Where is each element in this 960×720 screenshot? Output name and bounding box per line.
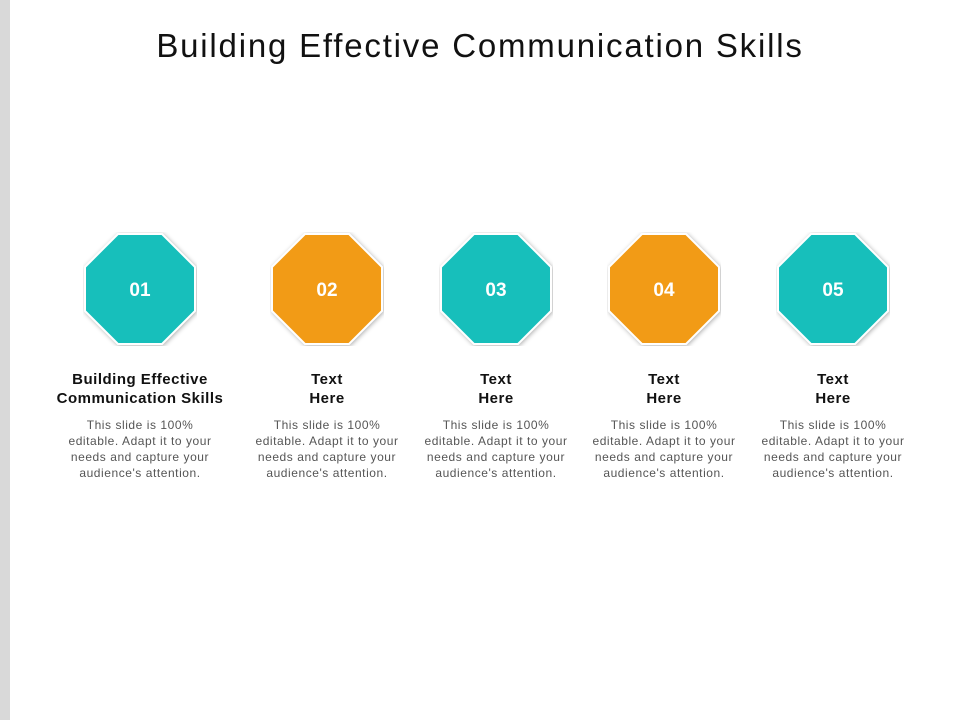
item 03: [424, 232, 568, 480]
text 04: [592, 418, 736, 480]
text 04: needs and capture your: [595, 450, 733, 464]
title: Building Effective Communication Skills: [156, 27, 804, 64]
text 02: [255, 418, 399, 480]
heading 05: [815, 371, 851, 407]
text 05: editable. Adapt it to your: [761, 434, 905, 448]
text 05: [761, 418, 905, 480]
item 04: [592, 232, 736, 480]
text 01: [68, 418, 212, 480]
icon: octagon 03: [439, 232, 553, 346]
icon: octagon 03: 03: [485, 280, 507, 301]
text 01: This slide is 100%: [87, 418, 193, 432]
text 03: needs and capture your: [427, 450, 565, 464]
text 03: [424, 418, 568, 480]
heading 04: Text: [648, 371, 680, 388]
icon: octagon 05: 05: [822, 280, 844, 301]
heading 04: Here: [646, 390, 682, 407]
icon: octagon 05: [776, 232, 890, 346]
icon: octagon 01: [83, 232, 197, 346]
text 05: needs and capture your: [764, 450, 902, 464]
text 01: audience's attention.: [79, 466, 201, 480]
text 01: needs and capture your: [71, 450, 209, 464]
text 01: editable. Adapt it to your: [68, 434, 212, 448]
item 05: [761, 232, 905, 480]
heading 01: Building Effective: [72, 371, 208, 388]
heading 02: Text: [311, 371, 343, 388]
text 04: editable. Adapt it to your: [592, 434, 736, 448]
text 02: This slide is 100%: [274, 418, 380, 432]
text 03: editable. Adapt it to your: [424, 434, 568, 448]
icon: octagon 02: [270, 232, 384, 346]
heading 04: [646, 371, 682, 407]
icon: octagon 01: 01: [129, 280, 151, 301]
text 04: This slide is 100%: [611, 418, 717, 432]
text 03: audience's attention.: [435, 466, 557, 480]
text 04: audience's attention.: [603, 466, 725, 480]
text 02: editable. Adapt it to your: [255, 434, 399, 448]
heading 02: [309, 371, 345, 407]
heading 03: [478, 371, 514, 407]
icon: octagon 04: 04: [653, 280, 675, 301]
heading 02: Here: [309, 390, 345, 407]
text 02: needs and capture your: [258, 450, 396, 464]
text 03: This slide is 100%: [443, 418, 549, 432]
heading 01: Communication Skills: [57, 390, 223, 407]
heading 05: Here: [815, 390, 851, 407]
heading 03: Here: [478, 390, 514, 407]
heading 05: Text: [817, 371, 849, 388]
item 02: [255, 232, 399, 480]
heading 03: Text: [480, 371, 512, 388]
text 02: audience's attention.: [266, 466, 388, 480]
icon: octagon 02: 02: [316, 280, 338, 301]
text 05: audience's attention.: [772, 466, 894, 480]
icon: octagon 04: [607, 232, 721, 346]
text 05: This slide is 100%: [780, 418, 886, 432]
item 01: [57, 232, 223, 480]
heading 01: [57, 371, 223, 407]
